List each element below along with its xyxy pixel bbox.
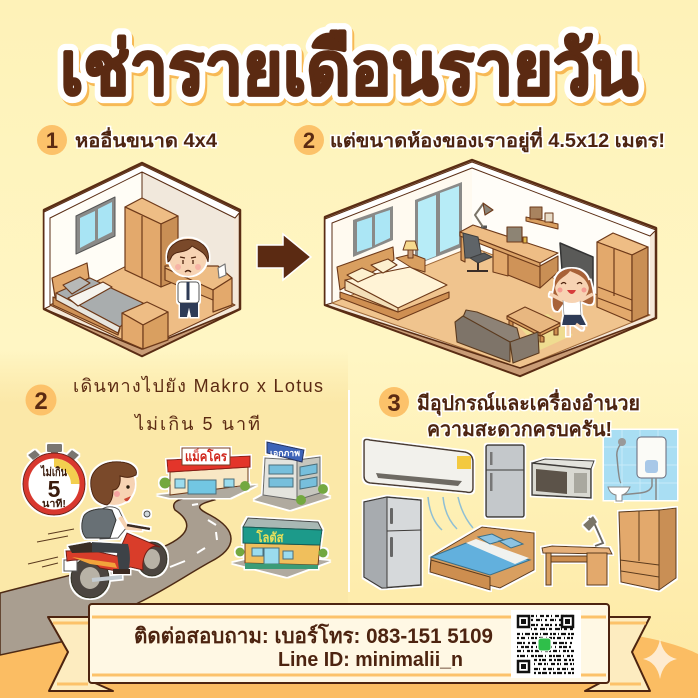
contact text: ติดต่อสอบถาม: เบอร์โทร: 083-151 5109 [134, 623, 493, 648]
contact text: Line ID: minimalii_n [278, 649, 463, 671]
heading: step 2 room size: 2 [303, 128, 315, 153]
icon: small fridge [486, 445, 524, 517]
speed lines [28, 529, 74, 567]
heading: step 3 amenities: มีอุปกรณ์และเครื่องอำนวย [417, 388, 640, 416]
heading: step 1: 1 [46, 128, 58, 153]
store: Makro: แม็คโคร [185, 447, 227, 464]
storage box [122, 302, 168, 349]
heading: step 2 room size: แต่ขนาดห้องของเราอยู่ที่ 4.5x12 เมตร! [330, 127, 665, 153]
sparkle [643, 639, 677, 679]
desk with lamp [460, 203, 558, 288]
icon: air flow [428, 497, 473, 530]
ribbon left tail [48, 617, 113, 691]
store: Makro [157, 447, 257, 498]
rug [515, 314, 573, 350]
building: Ekkaphap [254, 442, 330, 510]
glass door [415, 182, 462, 265]
heading: step 3 amenities: ความสะดวกครบครัน! [427, 419, 612, 441]
ribbon panel [89, 604, 609, 683]
icon: bed [430, 527, 534, 590]
QR code [511, 610, 581, 678]
text: travel to Makro and Lotus: ไม่เกิน 5 นาที [133, 413, 260, 434]
bed [337, 247, 449, 320]
nightstand with lamp [396, 241, 425, 272]
heading: step 1: หออื่นขนาด 4x4 [75, 127, 217, 152]
arrow [257, 234, 311, 280]
small room illustration [44, 163, 240, 356]
title: เช่ารายเดือนรายวัน [60, 27, 638, 110]
ribbon right tail [585, 617, 650, 691]
text: travel to Makro and Lotus [73, 375, 323, 434]
heading: step 3 amenities [379, 387, 640, 441]
icon: water heater and tiles [604, 430, 677, 501]
icon: large fridge [364, 497, 421, 588]
shelf [526, 207, 558, 229]
heading: step 3 amenities: 3 [387, 390, 401, 417]
road [0, 497, 231, 655]
heading: step 2 room size [294, 125, 665, 155]
wardrobe [125, 198, 178, 287]
orange hill background [0, 620, 698, 698]
desk [165, 264, 232, 312]
television [560, 243, 593, 287]
store: Lotus [232, 518, 330, 577]
icon: microwave [532, 459, 594, 498]
road markings [170, 504, 217, 567]
divider [348, 390, 350, 592]
building: Ekkaphap: เอกภาพ [270, 448, 300, 458]
coffee table [507, 307, 560, 342]
icon: wardrobe [619, 508, 676, 590]
stopwatch: not over 5 minutes: นาที! [42, 498, 66, 510]
stopwatch: not over 5 minutes: ไม่เกิน [39, 464, 68, 479]
icon: desk with lamp [542, 516, 612, 585]
heading: step 2 nearby: 2 [34, 388, 48, 415]
office chair [463, 233, 492, 271]
sofa [455, 310, 539, 363]
contact ribbon [48, 604, 650, 691]
wardrobe [597, 233, 648, 322]
store: Lotus: โลตัส [256, 529, 284, 545]
character: boy, sad [168, 238, 208, 317]
heading: step 1 [37, 125, 217, 155]
contact text [134, 623, 493, 671]
ribbon stripes [53, 617, 646, 684]
title: เช่ารายเดือนรายวัน [62, 30, 640, 113]
window [76, 197, 115, 254]
title: เช่ารายเดือนรายวัน [60, 27, 638, 110]
heading: step 2 nearby [26, 384, 56, 416]
character: happy girl [550, 268, 594, 336]
window [353, 206, 393, 257]
boy on motorbike [64, 462, 167, 598]
stopwatch: not over 5 minutes [23, 444, 85, 515]
text: travel to Makro and Lotus: เดินทางไปยัง Makro x Lotus [73, 375, 323, 396]
bed [52, 263, 143, 335]
large room illustration [325, 160, 656, 376]
icon: air conditioner [364, 439, 473, 492]
stopwatch: not over 5 minutes: 5 [48, 476, 61, 502]
